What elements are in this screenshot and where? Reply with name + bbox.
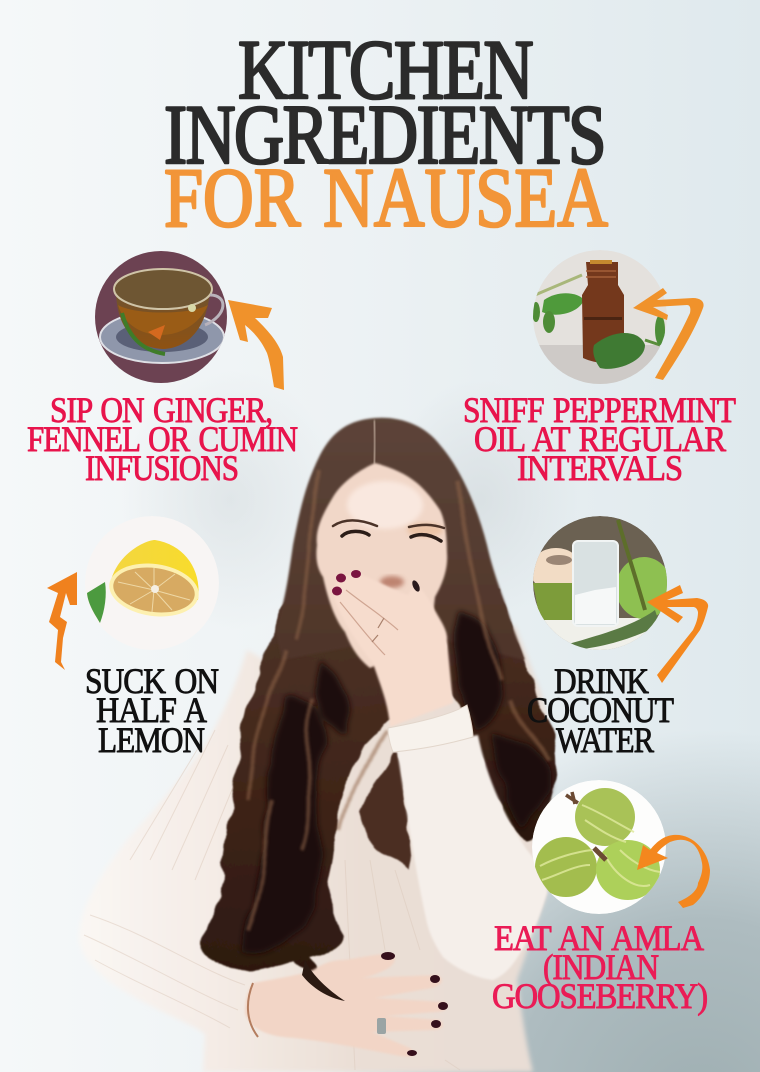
icon: half lemon: [87, 516, 219, 624]
falling curl over hand: [302, 966, 345, 1001]
text: lemon caption: LEMON: [98, 720, 205, 760]
hair dark curls: [240, 610, 549, 951]
hair parting: [374, 420, 375, 464]
panel: lemon: [47, 516, 219, 760]
title: INGREDIENTS: [164, 88, 605, 182]
text: coconut caption: COCONUT: [527, 690, 674, 730]
hair lower left: [200, 590, 390, 1000]
panel: tea: [27, 250, 298, 488]
hair crown: [276, 418, 525, 660]
text: peppermint caption: INTERVALS: [517, 448, 682, 488]
hair lower right: [440, 590, 556, 843]
lower hand: [245, 954, 447, 1057]
text: tea caption: INFUSIONS: [85, 448, 238, 488]
panel: amla: [492, 780, 710, 1016]
text: lemon caption: HALF A: [96, 690, 207, 730]
text: tea caption: SIP ON GINGER,: [50, 390, 272, 430]
woman illustration: [79, 418, 556, 1072]
hair highlights: [248, 470, 550, 930]
title: FOR NAUSEA: [164, 151, 608, 245]
text: coconut caption: WATER: [556, 720, 654, 760]
eyebrows and eyes: [333, 520, 444, 541]
title: KITCHEN: [238, 23, 533, 117]
text: amla caption: [492, 918, 707, 1016]
sweater ribbing: [84, 730, 460, 1070]
cuff: [388, 705, 473, 752]
eye shadow tint: [407, 523, 443, 537]
icon: gooseberries: [532, 780, 666, 914]
text: amla caption: EAT AN AMLA: [494, 918, 704, 958]
icon: coconut water: [530, 516, 672, 652]
hair middle lock: [358, 750, 412, 868]
text: coconut caption: [527, 661, 674, 760]
finger lines: [340, 590, 398, 655]
panel: peppermint: [463, 250, 736, 488]
text: lemon caption: [85, 661, 219, 760]
arrow: coconut: [647, 585, 708, 683]
text: peppermint caption: OIL AT REGULAR: [474, 419, 726, 459]
arrow: tea: [228, 300, 284, 390]
icon: cup of tea: [94, 250, 228, 384]
panel: coconut: [527, 516, 708, 760]
title: [164, 23, 608, 245]
icon: peppermint oil bottle: [532, 250, 667, 390]
face: [316, 463, 447, 668]
text: lemon caption: SUCK ON: [85, 661, 219, 701]
nose and mouth shadow: [380, 576, 404, 588]
arrow: amla: [637, 835, 710, 908]
text: amla caption: (INDIAN: [543, 947, 659, 987]
nails upper: [332, 570, 421, 596]
bracelet: [248, 983, 258, 1037]
arrow: lemon: [47, 572, 77, 670]
lower hand nails and ring: [377, 952, 448, 1056]
sweater body: [79, 625, 551, 1072]
text: tea caption: [27, 390, 298, 488]
arrow: peppermint: [633, 288, 704, 380]
text: peppermint caption: [463, 390, 736, 488]
raised arm sleeve: [397, 735, 547, 980]
text: coconut caption: DRINK: [554, 661, 649, 701]
text: tea caption: FENNEL OR CUMIN: [27, 419, 298, 459]
text: amla caption: GOOSEBERRY): [492, 976, 707, 1016]
raised hand: [372, 582, 454, 726]
